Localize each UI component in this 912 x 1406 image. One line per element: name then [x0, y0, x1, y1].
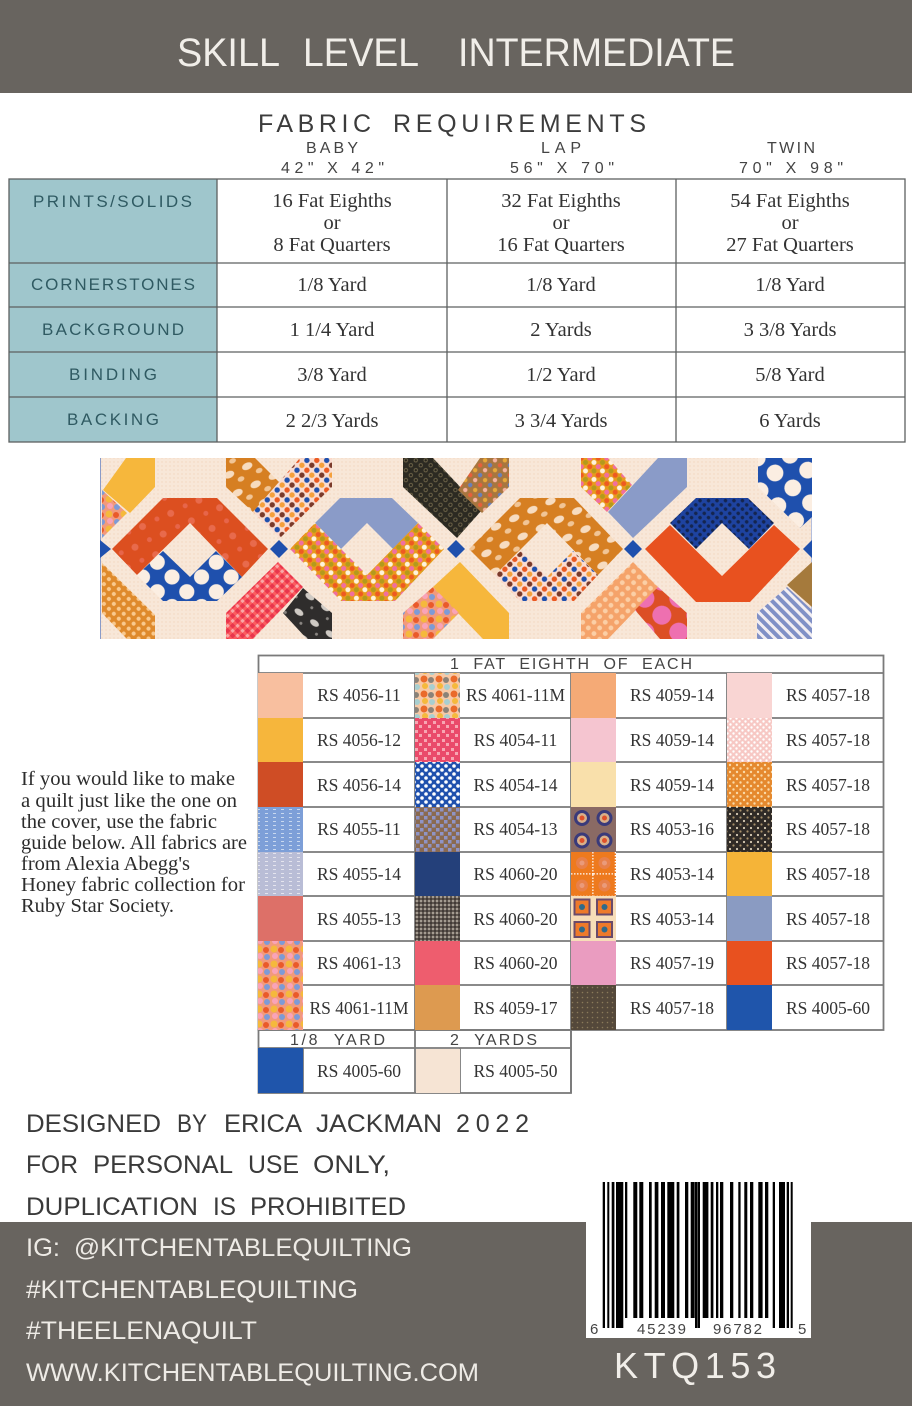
row labels: BACKING: [67, 410, 159, 429]
cover quilt note: Honey fabric collection for: [21, 874, 245, 896]
cover quilt note: from Alexia Abegg's: [21, 853, 190, 875]
fabric column 4: RS 4057-18: [786, 775, 870, 795]
table values: 1/2 Yard: [526, 364, 596, 386]
fabric column 1: RS 4055-14: [317, 864, 401, 884]
fabric column 1: RS 4061-13: [317, 953, 401, 973]
fabric column 4: RS 4057-18: [786, 819, 870, 839]
barcode digits: 96782: [713, 1321, 762, 1338]
row labels: BACKGROUND: [42, 320, 184, 339]
fabric column 4: RS 4005-60: [786, 998, 870, 1018]
designer credit: [26, 1110, 529, 1221]
designer credit: JACKMAN: [316, 1110, 442, 1138]
size headers: BABY: [306, 140, 358, 157]
two yards fabric: [416, 1032, 558, 1093]
quilt ring 4: [645, 498, 800, 602]
table values: 5/8 Yard: [755, 364, 825, 386]
social links: [26, 1234, 479, 1387]
table values: 16 Fat Eighths: [272, 190, 392, 212]
skill level heading: [177, 31, 735, 75]
heading: fabric requirements: FABRIC: [258, 110, 371, 138]
social links: #THEELENAQUILT: [26, 1317, 257, 1345]
fabric column 1: RS 4055-13: [317, 909, 401, 929]
designer credit: ONLY,: [313, 1151, 390, 1179]
designer credit: BY: [177, 1110, 207, 1138]
fabric column 3: RS 4059-14: [630, 775, 714, 795]
fabric column 4: RS 4057-18: [786, 953, 870, 973]
cover quilt note: [21, 768, 247, 917]
table values: 8 Fat Quarters: [273, 234, 391, 256]
fabric column 2: RS 4060-20: [473, 953, 558, 973]
fabric column 3: RS 4057-18: [630, 998, 714, 1018]
one eighth yard fabric: 1/8 YARD: [290, 1032, 385, 1049]
table values: 16 Fat Quarters: [497, 234, 625, 256]
table values: 3 3/8 Yards: [744, 319, 836, 341]
table values: 2 2/3 Yards: [286, 410, 378, 432]
fabric column 2: RS 4054-14: [473, 775, 558, 795]
table values: 54 Fat Eighths: [730, 190, 850, 212]
fabric column 1: RS 4056-12: [317, 730, 401, 750]
size headers: 70" X 98": [739, 160, 843, 177]
size headers: TWIN: [767, 140, 815, 157]
designer credit: IS: [213, 1193, 236, 1221]
table values: 1 1/4 Yard: [290, 319, 374, 341]
social links: @KITCHENTABLEQUILTING: [74, 1234, 412, 1262]
cover quilt note: the cover, use the fabric: [21, 811, 217, 833]
designer credit: PROHIBITED: [250, 1193, 406, 1221]
quilt cornerstones: [100, 540, 812, 558]
barcode: [586, 1170, 811, 1338]
row labels: [31, 192, 195, 429]
skill level heading: SKILL: [177, 31, 280, 75]
fabric guide table: [258, 656, 884, 1093]
table values: 2 Yards: [530, 319, 592, 341]
heading: fabric requirements: REQUIREMENTS: [393, 110, 646, 138]
fabric column 2: RS 4060-20: [473, 864, 558, 884]
table values: or: [323, 212, 341, 234]
table values: or: [781, 212, 799, 234]
fabric column 3: RS 4057-19: [630, 953, 714, 973]
social links: WWW.KITCHENTABLEQUILTING.COM: [26, 1359, 479, 1387]
table values: 3/8 Yard: [297, 364, 367, 386]
fat eighth header: 1 FAT EIGHTH OF EACH: [450, 656, 692, 673]
table values: 6 Yards: [759, 410, 821, 432]
designer credit: PERSONAL: [93, 1151, 233, 1179]
table values: 1/8 Yard: [297, 274, 367, 296]
table values: or: [552, 212, 570, 234]
fabric requirements table: [9, 179, 905, 442]
quilt ring 1: [112, 498, 268, 601]
cover quilt note: If you would like to make: [21, 768, 235, 790]
cover quilt note: a quilt just like the one on: [21, 790, 237, 812]
row labels: BINDING: [69, 365, 157, 384]
social links: #KITCHENTABLEQUILTING: [26, 1276, 358, 1304]
designer credit: DUPLICATION: [26, 1193, 198, 1221]
designer credit: FOR: [26, 1151, 78, 1179]
fabric column 2: RS 4059-17: [473, 998, 558, 1018]
quilt corner pieces top: [102, 458, 812, 538]
bottom banner: [0, 1222, 912, 1406]
one eighth yard fabric: RS 4005-60: [317, 1061, 401, 1081]
quilt ring 3: [469, 498, 623, 601]
fabric column 3: RS 4053-14: [630, 909, 714, 929]
fabric column 3: RS 4053-16: [630, 819, 714, 839]
quilt ring 2: [290, 498, 444, 601]
two yards fabric: RS 4005-50: [473, 1061, 558, 1081]
barcode digits: 6: [590, 1321, 598, 1338]
fabric column 4: RS 4057-18: [786, 909, 870, 929]
barcode digits: [590, 1321, 806, 1338]
fabric column 3: RS 4053-14: [630, 864, 714, 884]
designer credit: ERICA: [224, 1110, 302, 1138]
barcode digits: 5: [798, 1321, 806, 1338]
fabric column 4: RS 4057-18: [786, 864, 870, 884]
size headers: 42" X 42": [281, 160, 384, 177]
fabric column 1: RS 4055-11: [317, 819, 401, 839]
table values: 27 Fat Quarters: [726, 234, 854, 256]
fabric column 2: RS 4054-13: [473, 819, 558, 839]
fabric column 2: [415, 673, 565, 1030]
product code: KTQ153: [614, 1345, 776, 1386]
fabric column 3: [571, 673, 714, 1030]
two yards fabric: 2 YARDS: [450, 1032, 537, 1049]
fabric column 2: RS 4060-20: [473, 909, 558, 929]
social links: IG:: [26, 1234, 60, 1262]
designer credit: DESIGNED: [26, 1110, 161, 1138]
fabric column 2: RS 4061-11M: [466, 685, 565, 705]
barcode digits: 45239: [637, 1321, 686, 1338]
cover quilt note: Ruby Star Society.: [21, 895, 174, 917]
table values: 1/8 Yard: [526, 274, 596, 296]
cover quilt note: guide below. All fabrics are: [21, 832, 247, 854]
fabric column 1: RS 4061-11M: [309, 998, 409, 1018]
size headers: LAP: [541, 140, 581, 157]
row labels: PRINTS/SOLIDS: [33, 192, 192, 211]
fabric column 4: [727, 673, 870, 1030]
fabric column 1: [258, 673, 409, 1030]
quilt image: [100, 458, 812, 639]
table values: 3 3/4 Yards: [515, 410, 607, 432]
size headers: [281, 140, 843, 177]
fabric column 1: RS 4056-14: [317, 775, 401, 795]
top banner: [0, 0, 912, 93]
row labels: CORNERSTONES: [31, 275, 195, 294]
fabric column 1: RS 4056-11: [317, 685, 401, 705]
size headers: 56" X 70": [510, 160, 614, 177]
one eighth yard fabric: [258, 1032, 401, 1093]
table values: [272, 190, 854, 432]
designer credit: USE: [248, 1151, 299, 1179]
fabric column 4: RS 4057-18: [786, 730, 870, 750]
fabric column 3: RS 4059-14: [630, 730, 714, 750]
skill level heading: LEVEL: [303, 31, 419, 75]
heading: fabric requirements: [258, 110, 646, 138]
fabric column 2: RS 4054-11: [474, 730, 557, 750]
designer credit: 2022: [456, 1110, 529, 1138]
table values: 32 Fat Eighths: [501, 190, 621, 212]
table values: 1/8 Yard: [755, 274, 825, 296]
skill level heading: INTERMEDIATE: [458, 31, 735, 75]
fabric column 4: RS 4057-18: [786, 685, 870, 705]
fabric column 3: RS 4059-14: [630, 685, 714, 705]
quilt corner pieces bottom: [102, 562, 812, 639]
